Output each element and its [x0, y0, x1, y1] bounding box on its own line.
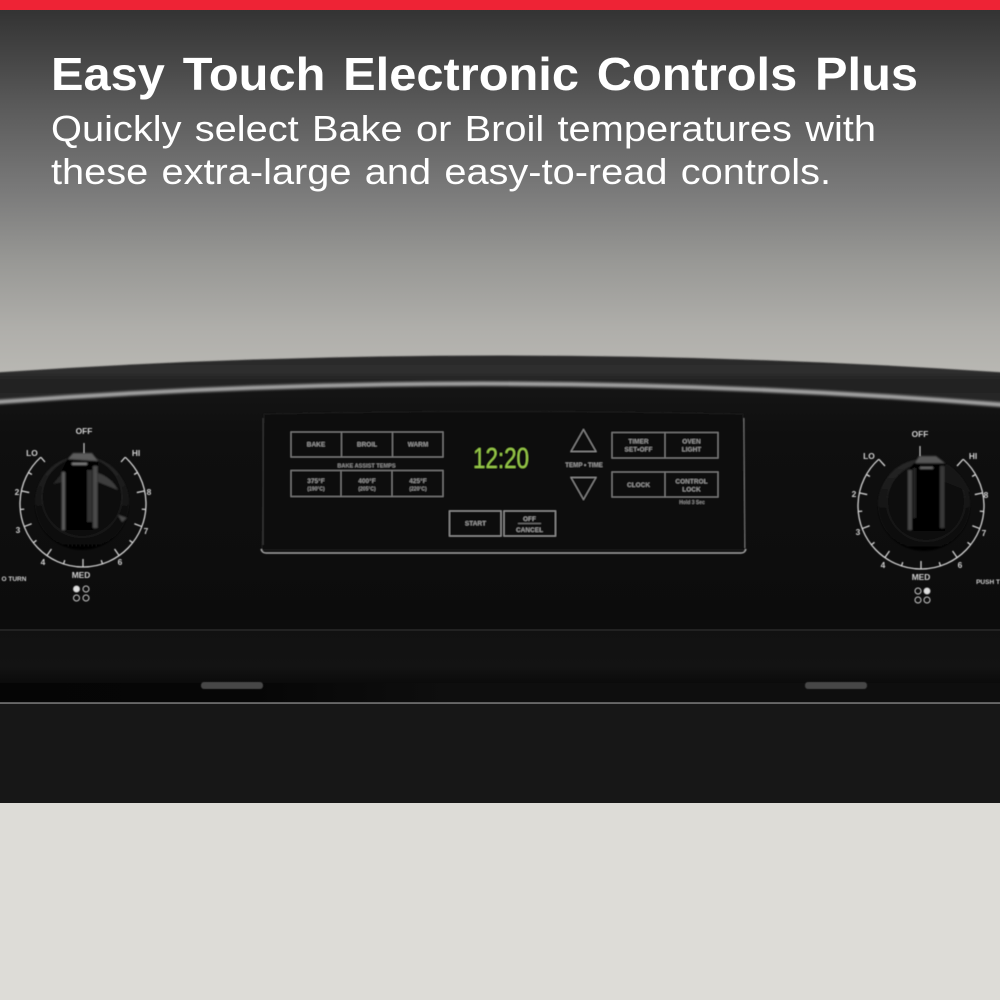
right knob [878, 456, 970, 551]
right scale [858, 459, 984, 569]
clock display: 12:20 [473, 443, 529, 475]
bake assist heading: BAKE ASSIST TEMPS [337, 464, 396, 470]
left knob labels: 8 [147, 487, 152, 497]
left knob labels: MED [72, 570, 90, 580]
right knob labels: HI [969, 451, 977, 461]
off cancel button: CANCEL [516, 527, 543, 534]
timer and oven light buttons [612, 432, 718, 458]
left knob labels: O TURN [2, 576, 27, 583]
lower body sections [0, 629, 1000, 803]
right off pointer mark [919, 446, 921, 456]
clock and control lock buttons [612, 472, 718, 497]
bake assist buttons: 400°F [358, 477, 376, 485]
door handle mount right [805, 682, 867, 689]
left knob labels [2, 426, 152, 583]
left knob with scale [2, 426, 152, 601]
start button [450, 511, 501, 536]
clock and control lock buttons: CLOCK [627, 482, 650, 489]
timer and oven light buttons: SET•OFF [625, 446, 652, 454]
off cancel button: OFF [523, 516, 536, 523]
hold note: Hold 3 Sec [679, 500, 705, 506]
left knob labels: OFF [76, 426, 92, 436]
red top bar [0, 0, 1000, 10]
right knob labels: 8 [984, 490, 989, 500]
curved highlight [0, 384, 1000, 408]
cook mode buttons [291, 432, 443, 457]
range control panel photo [0, 356, 1000, 803]
door handle mount left [201, 682, 263, 689]
right knob labels: 4 [881, 560, 886, 570]
cooktop back edge band [0, 356, 1000, 430]
display window [457, 434, 557, 494]
bake assist buttons: (205°C) [358, 486, 376, 492]
clock and control lock buttons: LOCK [682, 486, 701, 494]
panel outline [261, 412, 746, 553]
left knob labels: 4 [41, 557, 46, 567]
left knob labels: 2 [15, 487, 20, 497]
left knob labels: 7 [144, 526, 149, 536]
left knob labels: 6 [118, 557, 123, 567]
timer and oven light buttons: OVEN [682, 438, 701, 446]
bake assist buttons: 425°F [409, 477, 427, 485]
right knob labels: 6 [958, 560, 963, 570]
right knob labels: 2 [852, 489, 857, 499]
subtitle [51, 108, 876, 192]
left off pointer mark [83, 443, 85, 453]
gradient backdrop [0, 10, 1000, 380]
left knob labels: 3 [16, 525, 21, 535]
clock and control lock buttons: CONTROL [675, 478, 708, 486]
cook mode buttons: WARM [408, 442, 428, 448]
cook mode buttons: BROIL [357, 442, 377, 448]
right knob labels: OFF [912, 429, 928, 439]
right knob labels: PUSH T [976, 579, 1000, 586]
bake assist buttons: (190°C) [307, 486, 325, 492]
bake assist buttons [291, 470, 443, 496]
down arrow [571, 478, 596, 500]
right knob labels [852, 429, 1000, 586]
touch control panel [261, 412, 746, 553]
timer and oven light buttons: TIMER [628, 438, 649, 446]
cook mode buttons: BAKE [307, 442, 326, 448]
title: Easy Touch Electronic Controls Plus [51, 48, 918, 100]
left knob labels: HI [132, 448, 140, 458]
subtitle: Quickly select Bake or Broil temperatures with [51, 108, 876, 149]
start button: START [465, 520, 486, 528]
subtitle: these extra-large and easy-to-read controls. [51, 151, 831, 192]
front body [0, 384, 1000, 803]
bake assist buttons: 375°F [307, 477, 325, 485]
right knob labels: 3 [856, 527, 861, 537]
right knob labels: MED [912, 572, 930, 582]
right element indicator [915, 588, 930, 603]
temp time label: TEMP • TIME [565, 462, 603, 469]
left knob labels: LO [26, 448, 38, 458]
up arrow [571, 430, 596, 452]
off cancel button [504, 511, 556, 536]
timer and oven light buttons: LIGHT [682, 446, 701, 454]
right knob labels: 7 [982, 528, 987, 538]
left scale [20, 457, 146, 567]
right knob with scale [852, 429, 1000, 603]
left element indicator [74, 586, 89, 601]
bake assist buttons: (220°C) [409, 486, 427, 492]
right knob labels: LO [863, 451, 875, 461]
left knob [35, 453, 129, 550]
